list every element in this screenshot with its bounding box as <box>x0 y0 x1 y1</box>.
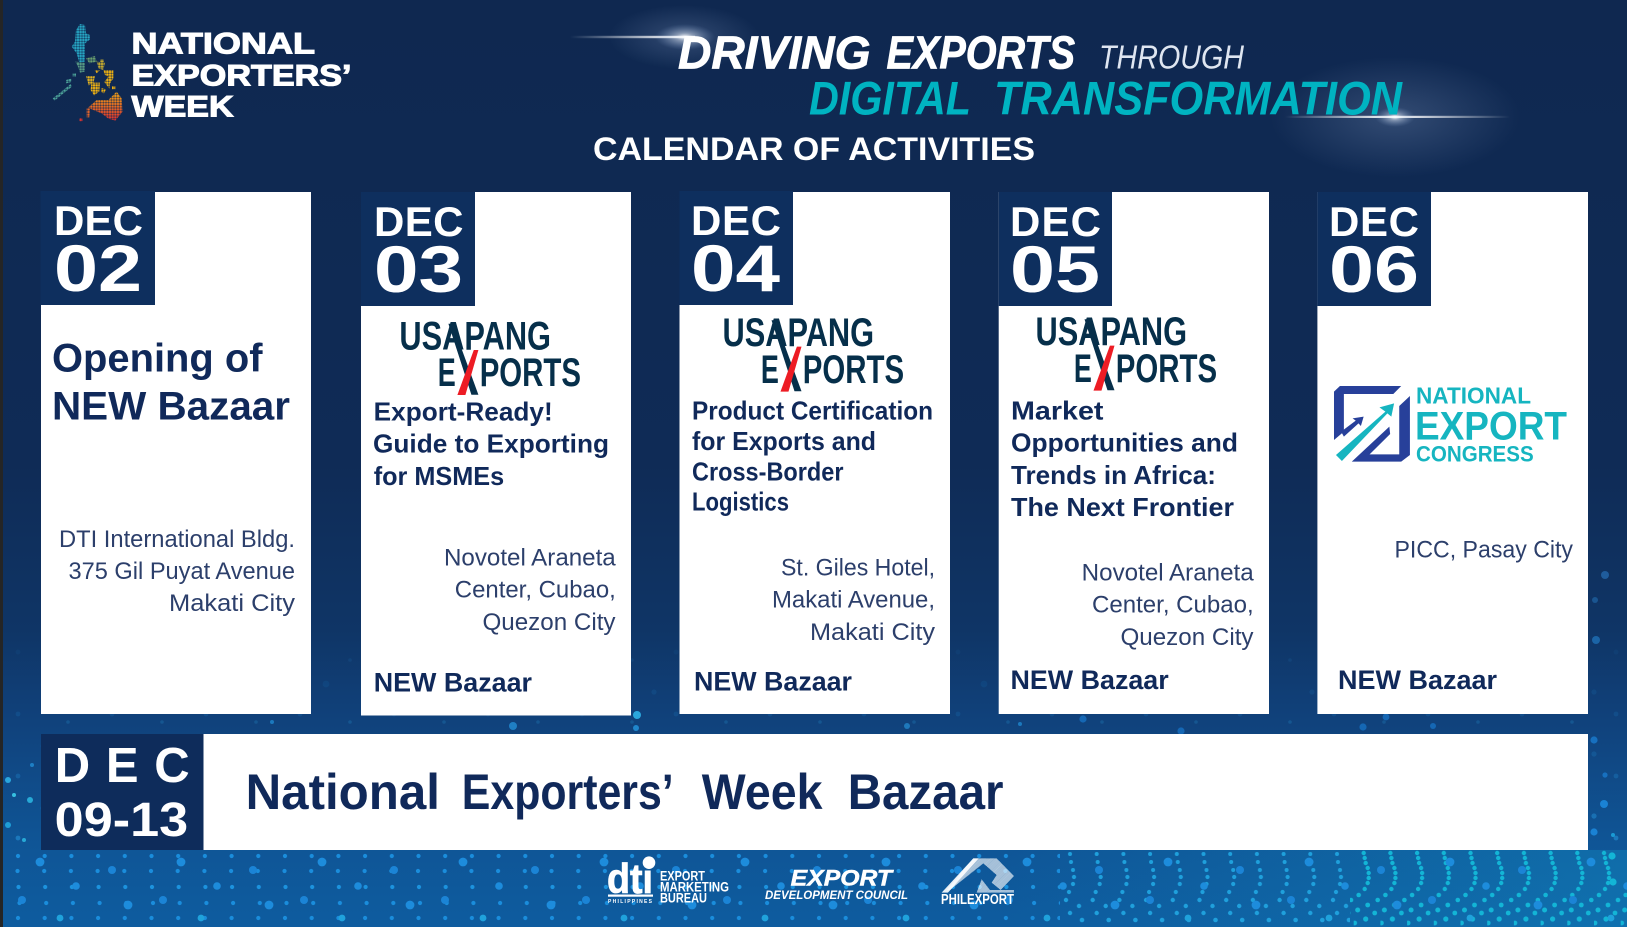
bazaar label: NEW Bazaar <box>374 668 532 698</box>
date tab: Dec 03: DEC <box>374 198 464 245</box>
logo: Usapang Exports: PORTS <box>1116 347 1217 391</box>
date tab: Dec 05: DEC <box>1010 198 1101 245</box>
panel: December 6 <box>1317 192 1588 714</box>
event title: Logistics <box>692 487 789 517</box>
logo wordmark <box>132 27 352 123</box>
venue: Center, Cubao, <box>1092 592 1254 619</box>
logo: National Export Congress <box>1334 382 1567 467</box>
event title: for Exports and <box>692 426 876 456</box>
date tab: Dec 05: 05 <box>1010 232 1100 306</box>
venue: Makati City <box>169 590 295 617</box>
date tab: Dec 04 <box>680 191 793 305</box>
event title <box>692 395 933 517</box>
logo: Philexport: PHILEXPORT <box>941 892 1014 908</box>
logo: Usapang Exports: USAPANG <box>399 314 551 358</box>
logo: Usapang Exports <box>722 311 904 392</box>
banner: National Exporters' Week Bazaar <box>41 734 1588 850</box>
venue <box>772 555 935 646</box>
venue: 375 Gil Puyat Avenue <box>68 558 295 585</box>
logo: Export Development Council <box>765 866 908 902</box>
venue: Center, Cubao, <box>455 577 616 604</box>
date tab: Dec 06: DEC <box>1329 198 1419 245</box>
venue: Quezon City <box>1120 624 1254 651</box>
logo: DTI Export Marketing Bureau: EXPORT <box>660 869 706 884</box>
logo wordmark: EXPORTERS’ <box>132 59 352 92</box>
event title: Cross-Border <box>692 457 844 487</box>
left edge strip <box>0 0 3 927</box>
title: DIGITAL <box>809 71 971 124</box>
venue <box>59 526 295 617</box>
logo: National Exporters' Week <box>53 24 351 123</box>
venue: St. Giles Hotel, <box>781 555 935 582</box>
icon: rising arrows in square <box>1334 386 1410 462</box>
venue <box>444 545 616 636</box>
venue: Novotel Araneta <box>444 545 616 572</box>
venue: PICC, Pasay City <box>1394 537 1573 564</box>
date tab: Dec 03: 03 <box>374 232 463 306</box>
logo wordmark: NATIONAL <box>132 27 315 60</box>
title: DRIVING <box>678 26 871 78</box>
date tab: Dec 03 <box>361 192 475 306</box>
logo: National Export Congress: NATIONAL <box>1416 382 1531 408</box>
date tab: Dec 09-13 <box>41 734 204 850</box>
date tab: Dec 02 <box>40 191 155 305</box>
title: EXPORTS <box>886 26 1075 78</box>
title <box>678 26 1403 124</box>
logo: Export Development Council: DEVELOPMENT COUNCIL <box>765 890 908 902</box>
lens flare right <box>1270 57 1520 177</box>
bazaar label: NEW Bazaar <box>694 667 852 697</box>
venue: Quezon City <box>482 609 616 636</box>
banner heading <box>246 764 1004 820</box>
venue: Makati City <box>810 619 935 646</box>
event title: Market <box>1011 395 1104 425</box>
event title <box>373 397 609 491</box>
bazaar label: NEW Bazaar <box>1010 665 1169 695</box>
date tab: Dec 06 <box>1317 192 1431 306</box>
background dot field <box>0 571 1627 927</box>
event title <box>52 336 290 428</box>
lens flare left <box>570 5 759 69</box>
venue: DTI International Bldg. <box>59 526 295 553</box>
date tab: Dec 04: DEC <box>691 197 781 244</box>
event title <box>1011 395 1238 522</box>
event title: Product Certification <box>692 395 933 425</box>
icon: Philippines dotted map <box>53 24 123 121</box>
panel: December 2 <box>40 191 311 714</box>
logo: DTI Export Marketing Bureau: PHILIPPINES <box>608 899 653 905</box>
venue <box>1082 560 1254 651</box>
logo: Usapang Exports <box>1036 310 1217 391</box>
event title: Guide to Exporting <box>373 429 609 459</box>
event title: The Next Frontier <box>1011 492 1234 522</box>
logo: Philexport <box>941 858 1014 908</box>
date tab: Dec 09-13: 09-13 <box>55 794 188 847</box>
banner heading: National <box>246 764 440 820</box>
logo: DTI Export Marketing Bureau: dti <box>607 855 653 902</box>
logo: National Export Congress: CONGRESS <box>1416 442 1534 467</box>
logo wordmark: WEEK <box>132 90 234 124</box>
logo: DTI Export Marketing Bureau <box>607 855 729 906</box>
logo: Usapang Exports: E <box>438 351 456 395</box>
event title: NEW Bazaar <box>52 384 290 428</box>
banner heading: Bazaar <box>848 764 1004 820</box>
logo: Usapang Exports: PORTS <box>803 348 904 392</box>
logo: National Export Congress: EXPORT <box>1415 404 1567 448</box>
event title: Export-Ready! <box>374 397 553 427</box>
date tab: Dec 06: 06 <box>1329 232 1419 306</box>
panel: December 5 <box>999 192 1269 714</box>
subtitle: calendar of activities: CALENDAR OF ACTIVITIES <box>593 131 1035 167</box>
logo: Usapang Exports: E <box>1074 347 1092 391</box>
date tab: Dec 09-13: DEC <box>55 739 190 793</box>
panel: December 4 <box>680 191 950 714</box>
event title: Opportunities and <box>1011 428 1238 458</box>
logo: Export Development Council: EXPORT <box>791 866 894 891</box>
title: TRANSFORMATION <box>994 71 1403 124</box>
logo: DTI Export Marketing Bureau: MARKETING <box>660 880 729 895</box>
panel: December 3 <box>361 192 631 716</box>
logo: Usapang Exports <box>399 314 581 395</box>
logo: Usapang Exports: USAPANG <box>722 311 874 355</box>
date tab: Dec 02: DEC <box>54 197 143 244</box>
date tab: Dec 05 <box>999 192 1112 306</box>
logo: Usapang Exports: USAPANG <box>1036 310 1187 354</box>
venue: Novotel Araneta <box>1082 560 1254 587</box>
banner heading: Exporters’ <box>462 764 674 820</box>
title: THROUGH <box>1099 38 1244 75</box>
logo: Usapang Exports: E <box>761 348 779 392</box>
event title: for MSMEs <box>374 461 504 491</box>
logo: Usapang Exports: PORTS <box>480 351 581 395</box>
footer logos <box>607 855 1014 908</box>
venue: Makati Avenue, <box>772 587 935 614</box>
banner heading: Week <box>702 764 823 820</box>
bazaar label: NEW Bazaar <box>1338 665 1497 695</box>
date tab: Dec 04: 04 <box>691 231 780 305</box>
event title: Trends in Africa: <box>1011 460 1216 490</box>
logo: DTI Export Marketing Bureau: BUREAU <box>660 891 707 906</box>
event title: Opening of <box>52 336 263 380</box>
date tab: Dec 02: 02 <box>54 231 142 305</box>
